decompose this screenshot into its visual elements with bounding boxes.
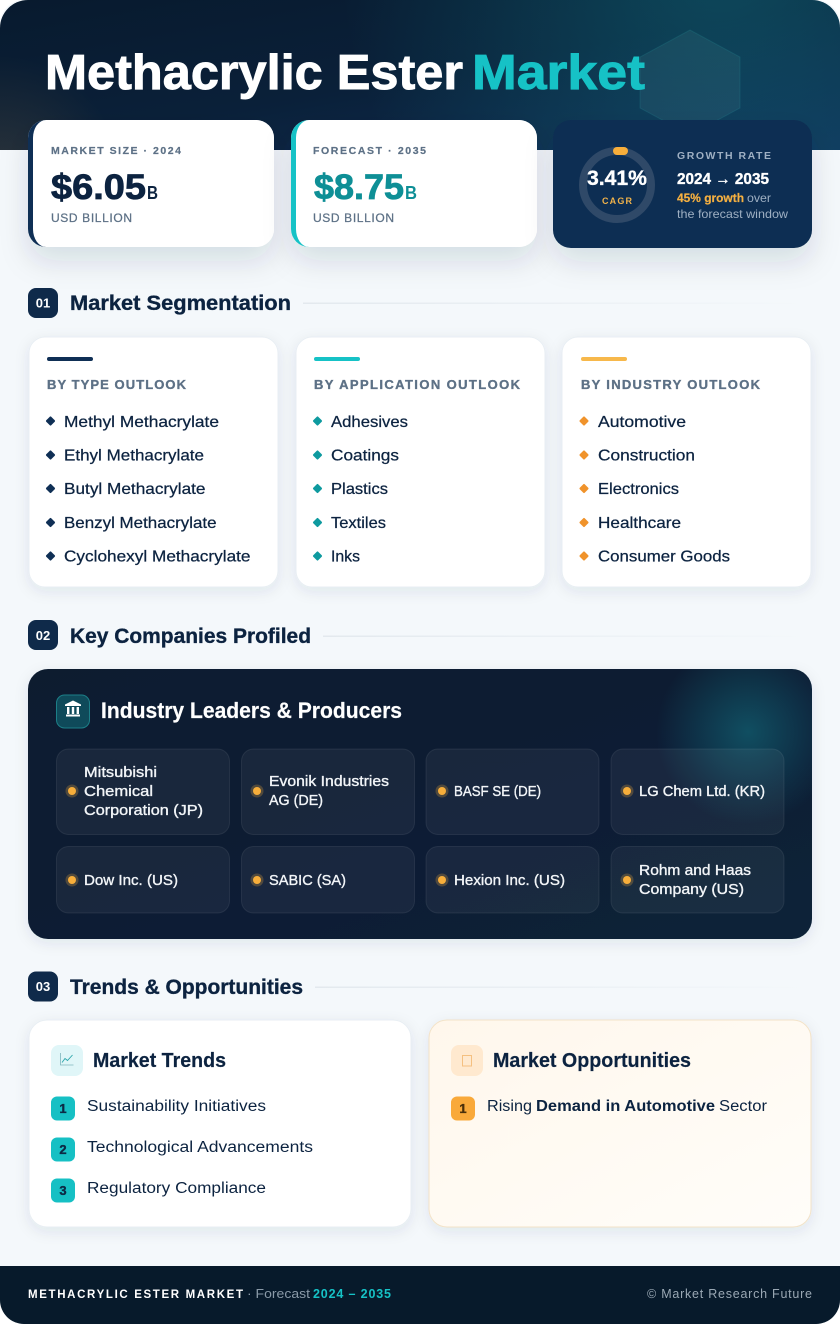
company: Mitsubishi: Mitsubishi [84,765,157,781]
opportunity 1: Sector [719,1098,767,1115]
company: Evonik [242,749,414,834]
trend 3: Regulatory Compliance [87,1180,266,1197]
panel: key companies: Industry Leaders & Producers [101,698,402,723]
company: SABIC: SABIC (SA) [269,873,346,889]
industry list: Electronics [598,481,679,498]
opportunity 1: Rising [487,1098,532,1115]
stat card: CAGR: the forecast window [677,207,788,221]
opportunity 1 [451,1096,767,1120]
trend 2 [51,1138,313,1162]
section heading 03: Trends & Opportunities [70,976,303,999]
panel: by application outlook: BY APPLICATION OUTLOOK [314,377,521,392]
section heading 01: 01 [36,296,50,310]
footer: 2024 – 2035 [313,1287,391,1301]
stat card: CAGR: over [747,191,771,205]
company grid [56,749,784,913]
type list: Methyl Methacrylate [64,414,219,431]
footer: © Market Research Future [647,1287,812,1301]
stat card: forecast 2035: USD BILLION [313,211,394,225]
header band [0,0,840,150]
type list: Butyl Methacrylate [64,481,206,498]
company: LG Chem: LG Chem Ltd. (KR) [639,784,765,800]
company: Rohm and Haas: Company (US) [639,882,744,898]
stat card: forecast 2035: B [405,183,417,203]
CAGR ring: CAGR [602,196,632,206]
company: Dow: Dow Inc. (US) [84,873,178,889]
title: Methacrylic Ester [45,46,463,100]
trend 3 [51,1178,266,1202]
CAGR ring [583,147,651,219]
stat card: forecast 2035 [291,120,537,247]
industry list: Healthcare [598,515,681,532]
panel: market opportunities [429,1020,811,1227]
panel: by application outlook [296,337,545,587]
company: Dow [56,846,230,913]
panel: market trends: Market Trends [93,1050,226,1072]
panel: by industry outlook [562,337,811,587]
trend 3: 3 [59,1183,67,1198]
stat card: market size 2024 [28,120,274,247]
stat card: CAGR: 2024 → 2035 [677,171,769,188]
company: BASF: BASF SE (DE) [454,784,541,800]
trend 1: Sustainability Initiatives [87,1098,266,1115]
company: Mitsubishi: Chemical [84,784,153,800]
industry list: Construction [598,448,695,464]
footer: METHACRYLIC ESTER MARKET [28,1289,243,1301]
application list: Adhesives [331,414,408,431]
stat card: CAGR: 45% growth [677,193,744,205]
application list: Inks [331,548,360,566]
company: Mitsubishi: Corporation (JP) [84,803,203,819]
trend 1: 1 [59,1101,67,1116]
company: Mitsubishi [56,749,230,834]
panel: market trends [29,1020,411,1227]
company: LG Chem [611,749,784,834]
application list: Textiles [331,515,386,532]
company: Hexion: Hexion Inc. (US) [454,873,565,889]
type list: Benzyl Methacrylate [64,515,217,532]
application list [313,414,408,566]
stat card: CAGR [553,120,812,248]
opportunity 1: 1 [459,1101,467,1116]
stat card: forecast 2035: FORECAST · 2035 [313,145,426,157]
company: BASF [426,749,599,834]
company: Evonik: Evonik Industries [269,774,389,790]
section heading 03 [28,972,812,1002]
company: Evonik: AG (DE) [269,793,323,809]
company: Hexion [426,846,599,913]
stat card: market size 2024: B [147,183,158,203]
icon: missing glyph box [451,1045,483,1076]
industry list: Consumer Goods [598,548,730,566]
application list: Plastics [331,481,388,498]
trend 1 [51,1096,266,1120]
company: Rohm and Haas [611,846,784,913]
industry list: Automotive [598,414,686,431]
panel: by type outlook: BY TYPE OUTLOOK [47,377,187,392]
panel: by type outlook [29,337,278,587]
company: SABIC [242,846,414,913]
application list: Coatings [331,448,399,464]
icon: line chart [51,1045,83,1076]
panel: market opportunities: Market Opportunities [493,1050,691,1072]
title: Market [472,46,645,100]
type list: Cyclohexyl Methacrylate [64,548,251,566]
type list: Ethyl Methacrylate [64,448,204,464]
section heading 02 [28,620,812,650]
section heading 02: 02 [36,628,50,643]
stat card: market size 2024: USD BILLION [51,211,132,225]
icon: bank building [56,695,90,728]
type list [46,414,251,566]
stat card: forecast 2035: $8.75 [314,168,404,207]
company: Rohm and Haas: Rohm and Haas [639,863,751,879]
stat card: CAGR: GROWTH RATE [677,150,771,162]
section heading 01 [28,288,812,318]
CAGR ring: 3.41% [587,167,647,190]
section heading 03: 03 [36,979,50,994]
section heading 02: Key Companies Profiled [70,625,311,648]
footer [0,1266,840,1324]
panel: key companies [28,669,812,939]
industry list [579,414,730,566]
panel: by industry outlook: BY INDUSTRY OUTLOOK [581,377,761,392]
stat card: market size 2024: $6.05 [51,168,146,207]
decorative hexagon [640,30,740,135]
stat card: market size 2024: MARKET SIZE · 2024 [51,145,181,157]
trend 2: Technological Advancements [87,1139,313,1156]
section heading 01: Market Segmentation [70,292,291,315]
opportunity 1: Demand in Automotive [536,1098,715,1115]
trend 2: 2 [59,1142,67,1157]
footer: · Forecast [247,1287,311,1301]
